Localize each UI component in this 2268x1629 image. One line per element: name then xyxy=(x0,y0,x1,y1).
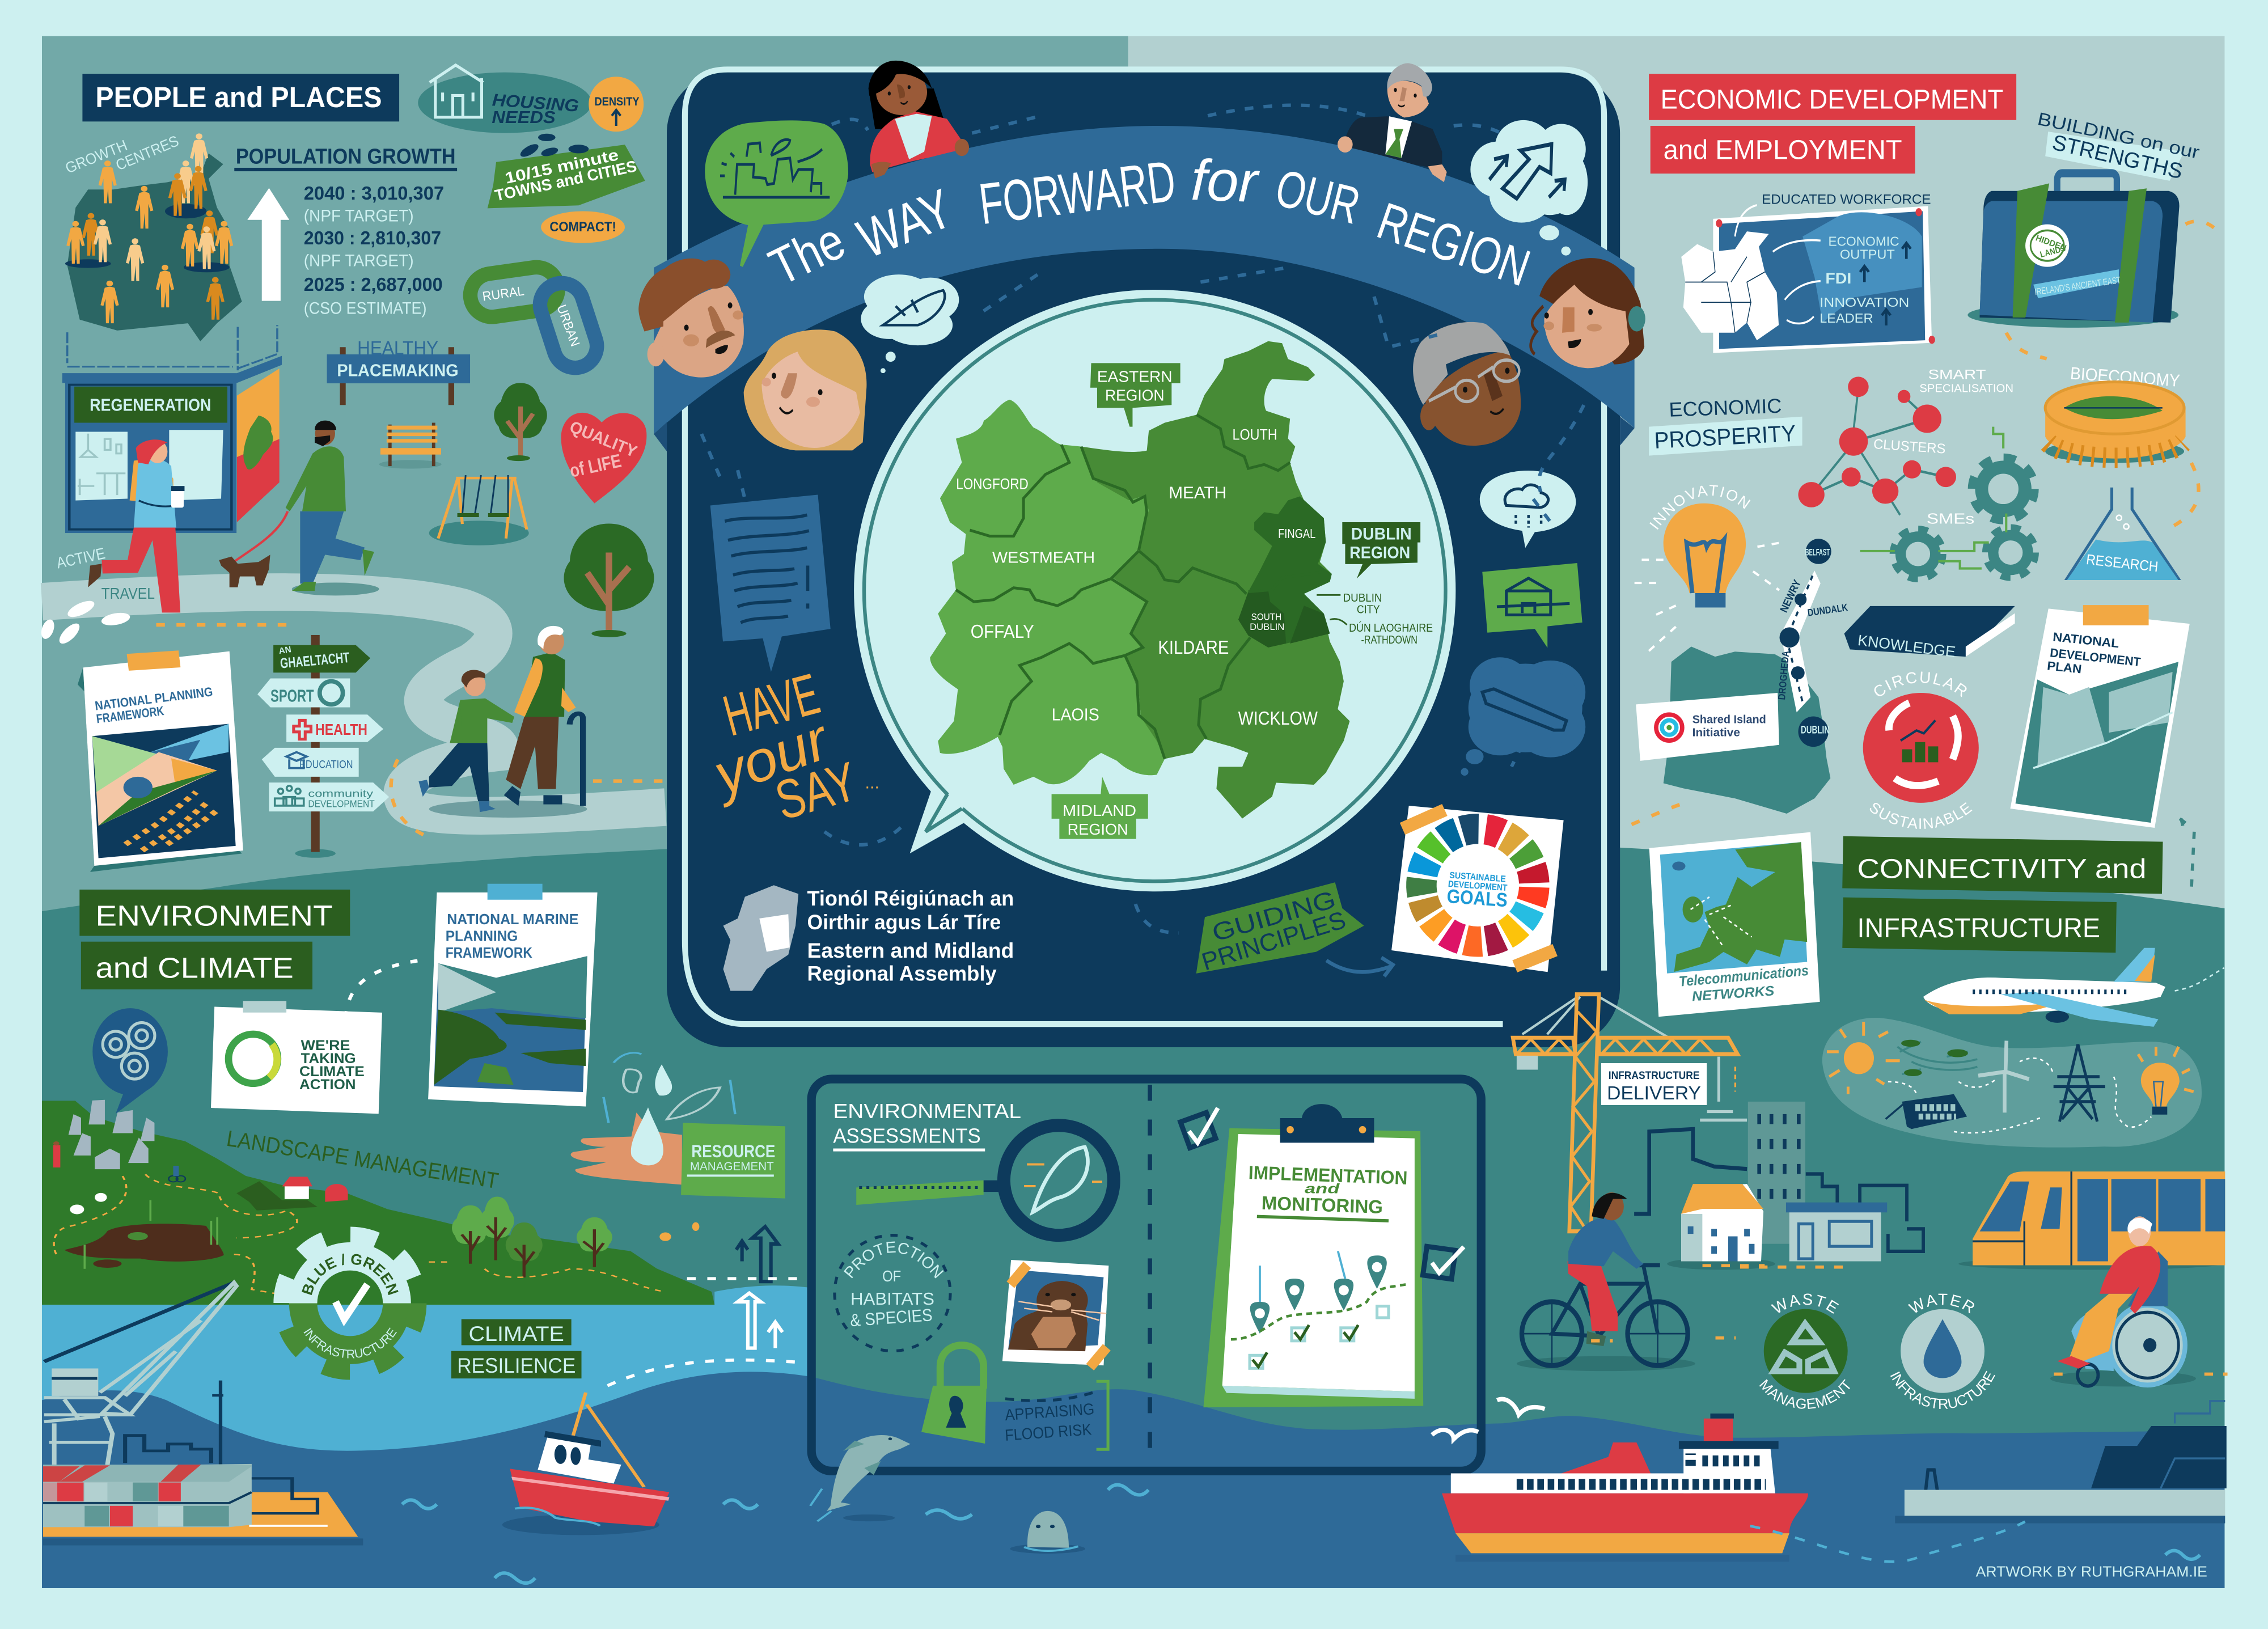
sign: an ghaeltacht: AN xyxy=(278,645,292,656)
active travel label xyxy=(39,544,155,647)
protection of habitats badge: PROTECTION xyxy=(844,1242,943,1279)
sign: community development xyxy=(269,782,389,811)
icon: wind turbine xyxy=(1978,1041,2029,1112)
assembly logo: Regional Assembly xyxy=(807,962,997,985)
artwork credit: ARTWORK BY RUTHGRAHAM.IE xyxy=(1976,1564,2207,1580)
icon: magnifying glass with leaf xyxy=(856,1126,1114,1235)
building on our strengths and suitcase: IRELAND'S ANCIENT EAST xyxy=(2034,274,2121,297)
water infrastructure badge xyxy=(1890,1294,1995,1409)
title: WAY xyxy=(849,177,961,270)
sea ripples xyxy=(402,1485,2200,1583)
photo: otter xyxy=(1002,1260,1111,1370)
poster: national marine planning framework xyxy=(428,884,598,1107)
bees and arrows xyxy=(607,1222,803,1386)
population growth: (NPF TARGET) xyxy=(304,206,414,225)
standing stones xyxy=(69,1100,154,1169)
label: dublin region xyxy=(1342,522,1420,578)
population growth: (CSO ESTIMATE) xyxy=(304,299,427,318)
rural urban chain: URBAN xyxy=(554,303,583,348)
arrow: dashed to connectivity xyxy=(2180,819,2194,890)
educated workforce map card: EDUCATED WORKFORCE xyxy=(1762,193,1931,208)
map of counties: LONGFORD xyxy=(956,475,1029,492)
assembly logo: Oirthir agus Lár Tíre xyxy=(807,911,1001,934)
landscape: green land xyxy=(42,1101,714,1305)
tree small xyxy=(494,383,547,461)
heading: environment and climate: and CLIMATE xyxy=(95,952,294,984)
poster: national planning framework: NATIONAL PLANNING xyxy=(94,684,214,713)
card: shared island: Initiative xyxy=(1692,726,1740,739)
card: we're taking climate action xyxy=(211,1001,382,1114)
sign: health xyxy=(286,714,383,742)
map of counties: SOUTH xyxy=(1251,611,1281,622)
SDG card xyxy=(1391,804,1564,972)
figure: woman in red jacket xyxy=(869,61,968,172)
walking path xyxy=(42,592,665,816)
energy cloud xyxy=(1822,1018,2202,1148)
bubble: pencil cloud xyxy=(1461,657,1585,776)
have your say: ... xyxy=(865,773,879,792)
figure: man walking dog xyxy=(219,421,379,595)
sign: community development: community xyxy=(308,788,373,799)
label: dublin region: REGION xyxy=(1349,544,1410,562)
counties: eastern region xyxy=(1081,341,1349,819)
heading: connectivity and infrastructure: INFRASTRUCTURE xyxy=(1857,913,2100,943)
blue green infrastructure gear: BLUE / GREEN xyxy=(302,1253,399,1295)
island economic corridor map: DUNDALK xyxy=(1807,602,1848,619)
quality of life heart: QUALITY xyxy=(567,417,640,462)
icon: solar panel xyxy=(1886,1094,1967,1129)
heading: connectivity and infrastructure: CONNECTIVITY and xyxy=(1857,853,2147,884)
seagulls xyxy=(1432,1399,1545,1439)
knowledge book: KNOWLEDGE xyxy=(1857,632,1957,661)
icon: pylon xyxy=(2054,1044,2105,1122)
clipboard: implementation and monitoring xyxy=(1203,1104,1423,1407)
signpost xyxy=(257,635,389,858)
poster: national development plan: PLAN xyxy=(2046,658,2083,676)
orange dashes right xyxy=(1632,221,2220,824)
housing needs: HOUSING xyxy=(492,90,579,116)
title: for xyxy=(1190,147,1261,214)
population growth: 2040 : 3,010,307 xyxy=(304,183,444,204)
educated workforce map card: LEADER xyxy=(1820,311,1873,325)
check boxes xyxy=(1180,1108,1464,1279)
card: we're taking climate action: TAKING xyxy=(301,1051,356,1067)
landscape details xyxy=(53,1100,662,1294)
figures: child and grandmother xyxy=(418,626,587,818)
crane: port xyxy=(44,1283,236,1465)
poster: national marine planning framework: FRAMEWORK xyxy=(446,945,532,961)
map of counties xyxy=(930,341,1433,839)
label: eastern region: REGION xyxy=(1105,387,1165,404)
building on our strengths and suitcase: HIDDEN xyxy=(2034,233,2067,253)
pier and skyline xyxy=(1895,1401,2227,1524)
bubble: green city xyxy=(705,120,848,267)
economic prosperity xyxy=(1649,395,1802,456)
town buildings xyxy=(1634,1102,1923,1270)
figure: cyclist xyxy=(1517,1192,1695,1371)
hands on banner xyxy=(871,136,1447,182)
ferry xyxy=(1442,1414,1808,1558)
population growth: 2030 : 2,810,307 xyxy=(304,228,441,249)
arrow xyxy=(1326,958,1393,976)
island economic corridor map xyxy=(1636,539,1848,814)
title: FORWARD xyxy=(976,149,1179,236)
dashed wake xyxy=(1750,1522,2025,1562)
quality of life heart: of LIFE xyxy=(568,450,623,482)
water infrastructure badge: WATER xyxy=(1907,1294,1974,1313)
people over the banner xyxy=(869,61,1442,172)
blue green infrastructure gear: INFRASTRUCTURE xyxy=(304,1327,397,1359)
assembly logo: Eastern and Midland xyxy=(807,939,1014,962)
population growth: POPULATION GROWTH xyxy=(236,144,456,168)
heading: environment and climate: ENVIRONMENT xyxy=(95,900,333,932)
map of counties: DÚN LAOGHAIRE xyxy=(1349,621,1433,634)
heading: environmental assessments: ASSESSMENTS xyxy=(833,1124,981,1147)
sign: community development: DEVELOPMENT xyxy=(308,798,375,809)
landscape management text: LANDSCAPE MANAGEMENT xyxy=(225,1126,500,1194)
infrastructure delivery sign: DELIVERY xyxy=(1607,1083,1701,1104)
educated workforce map card: OUTPUT xyxy=(1840,247,1895,262)
bubble: house xyxy=(1482,563,1582,648)
card: shared island: Shared Island xyxy=(1692,714,1766,726)
heading: environmental assessments xyxy=(833,1100,1021,1152)
bioeconomy coin: BIOECONOMY xyxy=(2070,363,2181,391)
text: appraising flood risk: FLOOD RISK xyxy=(1004,1420,1092,1444)
map of counties: FINGAL xyxy=(1278,526,1315,541)
poster: national development plan: DEVELOPMENT xyxy=(2049,645,2142,669)
map of counties: CITY xyxy=(1357,604,1380,616)
poster: national marine planning framework: PLANNING xyxy=(446,928,518,944)
tree large xyxy=(564,523,654,637)
SDG card: GOALS xyxy=(1446,886,1508,911)
research flask: RESEARCH xyxy=(2085,552,2159,575)
innovation bulb: INNOVATION xyxy=(1649,485,1751,530)
population growth xyxy=(234,144,457,318)
house xyxy=(1667,1184,1775,1270)
heading: people and places xyxy=(82,74,399,121)
heading: connectivity and infrastructure xyxy=(1842,836,2163,953)
educated workforce map card xyxy=(1681,193,1935,353)
building on our strengths and suitcase: LANDS xyxy=(2039,244,2067,260)
protection of habitats badge: OF xyxy=(882,1267,901,1285)
heading: economic development and employment: and EMPLOYMENT xyxy=(1664,135,1902,166)
dashed connector xyxy=(346,961,420,1018)
clusters network: SPECIALISATION xyxy=(1919,382,2013,395)
face: man with moustache xyxy=(638,259,744,378)
15 minute towns ribbon: 10/15 minute xyxy=(503,146,620,187)
clipboard: implementation and monitoring: MONITORING xyxy=(1261,1193,1383,1218)
card: shared island xyxy=(1636,693,1779,761)
sign: sport: SPORT xyxy=(270,686,314,705)
bog xyxy=(65,1224,224,1262)
poster: national planning framework xyxy=(78,650,243,872)
guiding principles ribbon: PRINCIPLES xyxy=(1199,907,1349,976)
clusters network: CLUSTERS xyxy=(1873,437,1946,457)
map of counties: DUBLIN xyxy=(1250,621,1284,632)
15 minute towns ribbon xyxy=(488,134,645,243)
knowledge book xyxy=(1844,606,2015,661)
document bubble xyxy=(710,494,831,672)
faces and bubbles xyxy=(638,120,1645,776)
farmhouse xyxy=(236,1177,348,1211)
divider xyxy=(1149,1085,1151,1464)
climate resilience: RESILIENCE xyxy=(457,1354,576,1377)
resource management hand: MANAGEMENT xyxy=(690,1159,774,1173)
circular sustainable badge: SUSTAINABLE xyxy=(1870,802,1972,829)
active travel label: TRAVEL xyxy=(101,585,155,602)
orange dashed trail xyxy=(156,625,665,839)
map of counties: MEATH xyxy=(1169,484,1226,502)
have your say: SAY xyxy=(769,750,864,832)
poster: national development plan: NATIONAL xyxy=(2052,629,2120,650)
map of counties: -RATHDOWN xyxy=(1361,634,1417,646)
icon: bulb xyxy=(2138,1047,2194,1115)
island economic corridor map: DUBLIN xyxy=(1801,724,1830,736)
compact badge xyxy=(541,211,625,243)
central dark panel xyxy=(667,73,1620,1047)
figure: wheelchair user xyxy=(2050,1216,2196,1386)
clipboard: implementation and monitoring: and xyxy=(1305,1182,1340,1197)
circular sustainable badge: CIRCULAR xyxy=(1875,671,1966,697)
map of counties: WICKLOW xyxy=(1238,708,1318,729)
growth centres map: GROWTH xyxy=(63,137,130,177)
telecommunications photo xyxy=(1649,832,1820,1017)
check mark xyxy=(336,1284,367,1319)
guiding principles ribbon: GUIDING xyxy=(1209,886,1339,947)
clipboard: implementation and monitoring: IMPLEMENTATION xyxy=(1248,1162,1408,1189)
label: dublin region: DUBLIN xyxy=(1351,525,1412,544)
label: midland region xyxy=(1052,777,1148,839)
have your say: HAVE xyxy=(717,661,826,748)
dashed connectors in panel xyxy=(701,105,1584,933)
rural urban chain xyxy=(468,264,603,374)
research flask xyxy=(2067,488,2178,580)
climate resilience: CLIMATE xyxy=(469,1322,564,1345)
educated workforce map card: INNOVATION xyxy=(1820,295,1909,310)
protection of habitats badge: HABITATS xyxy=(850,1289,934,1309)
icon: sun xyxy=(1827,1022,1900,1094)
bubble: arrows thought cloud xyxy=(1470,120,1588,256)
container ship xyxy=(43,1381,363,1545)
face: blonde woman xyxy=(744,329,866,450)
sign: health: HEALTH xyxy=(315,721,367,738)
icon: padlock xyxy=(921,1345,987,1444)
tram xyxy=(1958,1171,2225,1270)
dolphin xyxy=(810,1435,911,1521)
building on our strengths and suitcase: STRENGTHS xyxy=(2050,130,2185,184)
waste management badge: WASTE xyxy=(1771,1294,1839,1314)
blue green infrastructure gear xyxy=(273,1227,426,1380)
heading: environment and climate xyxy=(79,890,350,989)
sign: an ghaeltacht: GHAELTACHT xyxy=(280,650,350,672)
circular sustainable badge xyxy=(1863,671,1979,829)
guiding principles ribbon xyxy=(1196,882,1393,976)
arrow: growth up xyxy=(247,188,289,301)
educated workforce map card: FDI xyxy=(1825,270,1851,287)
label: eastern region: EASTERN xyxy=(1097,367,1173,385)
telecommunications photo: NETWORKS xyxy=(1691,983,1775,1004)
SMEs gears: SMEs xyxy=(1927,511,1974,527)
SMEs gears xyxy=(1860,427,2036,579)
figure: woman running with coffee xyxy=(88,439,184,612)
healthy placemaking sign: HEALTHY xyxy=(357,338,438,359)
map of counties: LOUTH xyxy=(1232,426,1277,443)
rural urban chain: RURAL xyxy=(481,284,525,304)
trail xyxy=(54,1174,662,1294)
text: appraising flood risk: APPRAISING xyxy=(1004,1400,1095,1424)
assembly logo xyxy=(723,885,1014,991)
counties: dublin region xyxy=(1238,496,1332,648)
educated workforce map card: ECONOMIC xyxy=(1828,234,1899,249)
economic prosperity: PROSPERITY xyxy=(1653,420,1796,454)
population growth: 2025 : 2,687,000 xyxy=(304,274,443,295)
title: REGION xyxy=(1370,192,1537,297)
map of counties: WESTMEATH xyxy=(992,548,1095,566)
label: midland region: MIDLAND xyxy=(1063,802,1136,819)
shop xyxy=(1786,1203,1887,1262)
clusters network xyxy=(1798,367,2013,515)
protection of habitats badge xyxy=(833,1234,952,1352)
heading: environmental assessments: ENVIRONMENTAL xyxy=(833,1100,1021,1123)
heading: economic development and employment xyxy=(1649,74,2016,174)
card: we're taking climate action: ACTION xyxy=(299,1077,356,1093)
sheep and walker xyxy=(53,1141,185,1214)
sign: sport xyxy=(257,678,350,707)
resource management hand: RESOURCE xyxy=(691,1141,775,1161)
heading: economic development and employment: ECONOMIC DEVELOPMENT xyxy=(1661,84,2003,115)
icon: suitcase xyxy=(1967,174,2180,328)
infrastructure delivery sign xyxy=(1601,1063,1707,1105)
climate resilience xyxy=(451,1319,582,1378)
title: The xyxy=(761,211,854,297)
sign: education xyxy=(262,748,359,777)
quality of life heart xyxy=(561,413,646,503)
label: eastern region xyxy=(1090,363,1180,427)
island economic corridor map: NEWRY xyxy=(1778,578,1804,615)
fishing boat xyxy=(502,1393,669,1535)
have your say xyxy=(702,661,879,832)
map of counties: KILDARE xyxy=(1158,637,1229,658)
bioeconomy coin xyxy=(2045,363,2186,463)
active travel label: ACTIVE xyxy=(55,544,107,572)
title banner xyxy=(654,126,1635,451)
have your say: your xyxy=(702,706,839,809)
face: woman with hearing aid xyxy=(1531,258,1645,368)
icon: triskele bubble xyxy=(92,1008,168,1114)
housing needs: NEEDS xyxy=(492,108,556,127)
poster: national planning framework: FRAMEWORK xyxy=(95,704,165,726)
map of counties: DUBLIN xyxy=(1343,592,1382,604)
label: midland region: REGION xyxy=(1068,820,1128,838)
resource management hand xyxy=(571,1053,785,1199)
density badge xyxy=(589,77,644,132)
SDG card: DEVELOPMENT xyxy=(1448,879,1508,893)
bubble: storm cloud xyxy=(1480,471,1576,548)
bench xyxy=(379,423,442,469)
protection of habitats badge: & SPECIES xyxy=(849,1305,933,1330)
waste management badge xyxy=(1759,1294,1850,1409)
building on our strengths and suitcase: BUILDING on our xyxy=(2036,108,2202,163)
poster: national marine planning framework: NATIONAL MARINE xyxy=(447,912,578,928)
housing needs xyxy=(418,65,644,133)
figure: man in suit xyxy=(1342,63,1442,170)
healthy placemaking sign: PLACEMAKING xyxy=(337,361,459,380)
economic prosperity: ECONOMIC xyxy=(1669,395,1782,421)
clusters network: SMART xyxy=(1928,367,1986,382)
swing xyxy=(429,475,529,545)
SDG card: SUSTAINABLE xyxy=(1449,871,1506,884)
title: OUR xyxy=(1270,159,1365,235)
title xyxy=(761,147,1537,297)
growth centres map: CENTRES xyxy=(113,132,181,174)
SDG wheel xyxy=(1398,806,1558,965)
telecommunications photo: Telecommunications xyxy=(1678,963,1809,990)
poster: national development plan xyxy=(2010,605,2190,828)
water infrastructure badge: INFRASTRUCTURE xyxy=(1890,1371,1995,1409)
seal xyxy=(1010,1511,1085,1554)
bubble: leaf thought cloud xyxy=(861,274,959,373)
card: we're taking climate action: WE'RE xyxy=(301,1038,350,1053)
map of counties: OFFALY xyxy=(971,621,1034,642)
assembly logo: Tionól Réigiúnach an xyxy=(807,887,1014,910)
sign: education: EDUCATION xyxy=(299,759,353,771)
waste management badge: MANAGEMENT xyxy=(1759,1379,1850,1409)
map of counties: LAOIS xyxy=(1052,705,1099,724)
tower crane xyxy=(1513,995,1747,1232)
heading: people and places: PEOPLE and PLACES xyxy=(95,81,382,113)
healthy placemaking sign xyxy=(327,338,470,405)
face: older man with glasses xyxy=(1413,322,1521,446)
counties: midland region xyxy=(930,400,1165,785)
card: we're taking climate action: CLIMATE xyxy=(299,1064,365,1080)
density badge: DENSITY xyxy=(594,94,640,108)
shop: regeneration xyxy=(62,325,282,533)
orange dashes on road xyxy=(1591,1266,2228,1374)
panel frame xyxy=(685,69,1604,1024)
speech bubble: map circle xyxy=(854,290,1455,891)
infrastructure delivery sign: INFRASTRUCTURE xyxy=(1609,1070,1700,1082)
building on our strengths and suitcase xyxy=(1967,108,2202,328)
text: appraising flood risk xyxy=(1004,1381,1108,1449)
island economic corridor map: BELFAST xyxy=(1805,547,1830,558)
shop: regeneration: REGENERATION xyxy=(90,396,211,415)
population growth: (NPF TARGET) xyxy=(304,251,414,270)
plane xyxy=(1923,948,2224,1027)
compact badge: COMPACT! xyxy=(549,219,616,235)
innovation bulb xyxy=(1634,485,1780,652)
island economic corridor map: DROGHEDA xyxy=(1776,650,1792,700)
growth centres map xyxy=(63,132,242,341)
panel: environmental assessments and implementation xyxy=(807,1074,1486,1475)
15 minute towns ribbon: TOWNS and CITIES xyxy=(493,157,638,204)
trees xyxy=(452,1197,612,1277)
